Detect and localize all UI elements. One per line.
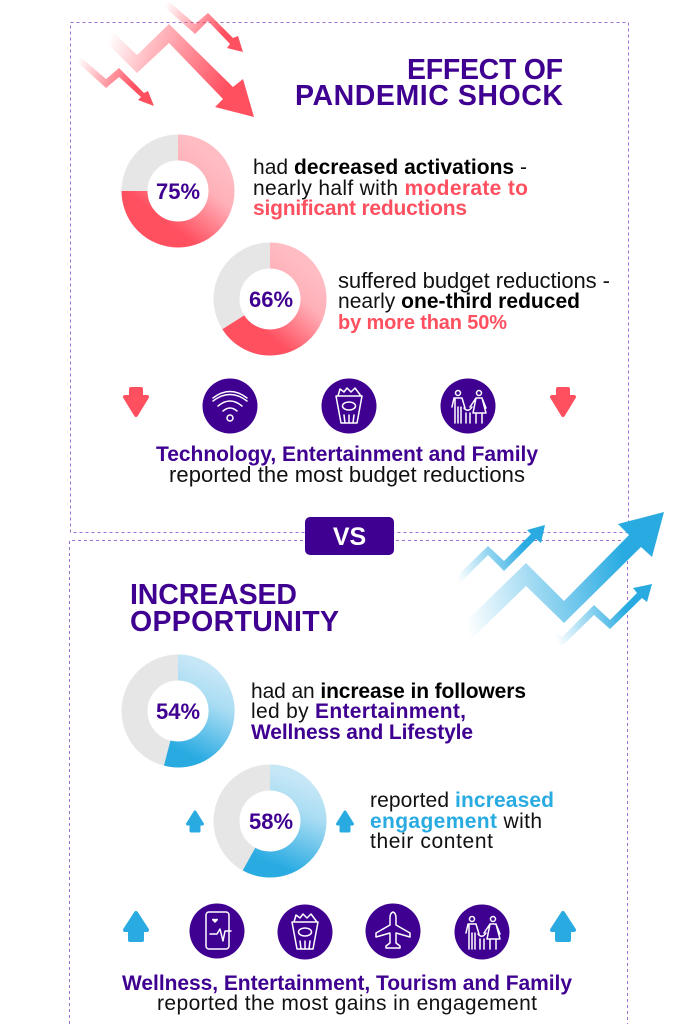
text: wellness, entertainment, tourism and family: reported the most gains in engagement [157, 992, 537, 1015]
chart: donut 58% [226, 778, 314, 864]
text: decreased activations: had decreased activations - [253, 156, 527, 179]
chart: donut 75% [134, 148, 222, 234]
text: increase in followers: led by Entertainment, [251, 700, 466, 723]
text: increase in followers: had an increase in followers [251, 680, 526, 703]
icon: red down arrow right [552, 389, 574, 415]
icon: rising blue arrows [455, 512, 664, 647]
text: decreased activations [253, 156, 528, 220]
text: technology, entertainment and family: reported the most budget reductions [169, 462, 525, 487]
icon: family [440, 378, 496, 434]
text: technology, entertainment and family [156, 443, 538, 487]
badge: VS [305, 517, 394, 555]
heading: effect of pandemic shock [295, 54, 563, 112]
text: decreased activations: nearly half with moderate to [253, 177, 528, 200]
icon: popcorn [322, 378, 376, 434]
chart: donut 66%: 66% [249, 287, 293, 312]
heading: effect of pandemic shock: PANDEMIC SHOCK [295, 80, 563, 112]
icon: wifi [202, 378, 258, 434]
text: wellness, entertainment, tourism and family: Wellness, Entertainment, Tourism and Family [122, 972, 572, 995]
text: increased engagement [370, 789, 554, 853]
chart: donut 75%: 75% [156, 179, 200, 204]
badge: VS: VS [333, 523, 366, 551]
text: decreased activations: significant reductions [253, 197, 467, 220]
text: budget reductions: by more than 50% [338, 312, 507, 334]
text: increased engagement: their content [370, 830, 493, 853]
icon: falling red arrows [75, 0, 254, 117]
chart: donut 58%: 58% [249, 809, 293, 834]
chart: donut 54%: 54% [156, 699, 200, 724]
panel: increased opportunity [70, 540, 628, 1024]
text: technology, entertainment and family: Technology, Entertainment and Family [156, 443, 538, 466]
heading: effect of pandemic shock: EFFECT OF [407, 54, 563, 86]
icon: small blue up arrow right [338, 812, 352, 831]
heading: increased opportunity: INCREASED [130, 579, 297, 611]
chart: donut 54% [134, 667, 222, 754]
icon: blue up arrow left [125, 913, 147, 940]
icon: family [454, 904, 510, 960]
chart: donut 66% [226, 256, 314, 342]
heading: increased opportunity: OPPORTUNITY [130, 606, 339, 638]
icon: small blue up arrow left [188, 812, 202, 831]
text: increase in followers: Wellness and Lifestyle [251, 721, 473, 744]
text: budget reductions: nearly one-third reduced [338, 290, 580, 313]
text: budget reductions: suffered budget reductions - [338, 268, 610, 293]
icon: red down arrow left [125, 389, 147, 415]
text: increased engagement: engagement with [370, 810, 542, 833]
icon: popcorn [278, 904, 332, 960]
icon: airplane [366, 904, 420, 958]
text: wellness, entertainment, tourism and family [122, 972, 572, 1015]
text: budget reductions [338, 268, 610, 334]
text: increased engagement: reported increased [370, 789, 554, 812]
text: increase in followers [251, 680, 526, 744]
icon: blue up arrow right [552, 913, 574, 940]
icon: wellness phone [190, 904, 244, 958]
panel: effect of pandemic shock [70, 22, 628, 532]
heading: increased opportunity [130, 579, 339, 638]
